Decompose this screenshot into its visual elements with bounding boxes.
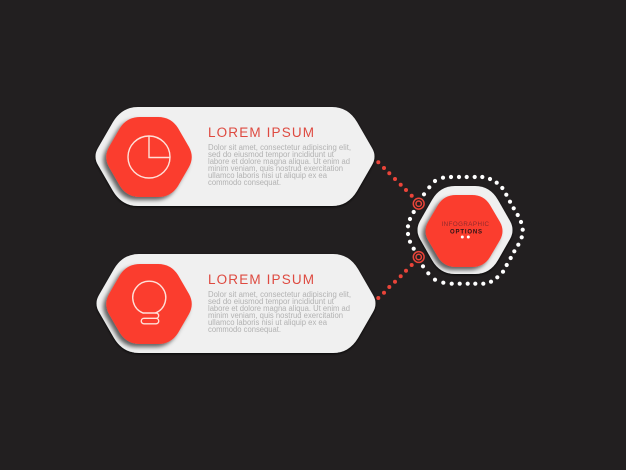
body text: commodo consequat.	[208, 178, 281, 187]
heading: LOREM IPSUM	[208, 272, 314, 287]
panel: top card	[96, 107, 374, 206]
body text	[208, 143, 351, 187]
card background	[96, 254, 376, 353]
white hexagon	[418, 186, 512, 274]
body text: sed do eiusmod tempor incididunt ut	[208, 150, 335, 159]
body text: Dolor sit amet, consectetur adipiscing elit,	[208, 143, 351, 152]
label: options: OPTIONS	[450, 230, 482, 236]
center hexagon badge	[418, 186, 512, 274]
ring node: upper	[413, 198, 424, 209]
red hexagon	[426, 195, 502, 267]
heading: LOREM IPSUM	[208, 125, 314, 140]
body text: sed do eiusmod tempor incididunt ut	[208, 297, 335, 306]
body text: ullamco laboris nisi ut aliquip ex ea	[208, 318, 328, 327]
white dotted hexagon ring	[406, 175, 525, 286]
red hexagon	[106, 264, 192, 344]
body text: ullamco laboris nisi ut aliquip ex ea	[208, 171, 328, 180]
body text: minim veniam, quis nostrud exercitation	[208, 164, 343, 173]
card background	[96, 107, 374, 206]
label: infographic: INFOGRAPHIC	[442, 221, 490, 228]
panel: bottom card	[96, 254, 376, 353]
decorative dots	[461, 236, 470, 238]
red hexagon	[106, 117, 192, 197]
body text: minim veniam, quis nostrud exercitation	[208, 311, 343, 320]
body text: labore et dolore magna aliqua. Ut enim ad	[208, 304, 350, 313]
icon: pie chart	[128, 136, 170, 178]
ring node: lower	[413, 252, 424, 262]
red dotted connector: upper	[376, 160, 414, 198]
body text: Dolor sit amet, consectetur adipiscing elit,	[208, 290, 351, 299]
body text: commodo consequat.	[208, 325, 281, 334]
icon: light bulb	[133, 281, 166, 324]
red dotted connector: lower	[376, 263, 414, 300]
body text	[208, 290, 351, 334]
body text: labore et dolore magna aliqua. Ut enim ad	[208, 157, 350, 166]
